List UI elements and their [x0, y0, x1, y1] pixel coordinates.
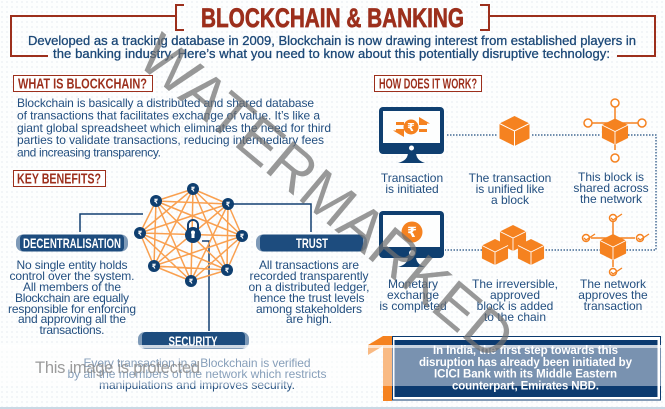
icon: monitor with rupee: ₹: [407, 121, 415, 134]
callout: india: [368, 336, 660, 401]
heading: key benefits: KEY BENEFITS?: [17, 172, 101, 188]
step: transaction initiated: [379, 107, 444, 196]
text: hence the trust levels: [254, 291, 364, 305]
step: approval: [578, 214, 649, 313]
icon: padlock: [185, 220, 201, 243]
callout box: [392, 336, 660, 400]
step: block added: [472, 225, 558, 324]
label: [472, 277, 558, 324]
text: transactions.: [40, 323, 104, 337]
label: is unified like: [476, 182, 545, 196]
panel: what is blockchain: [14, 76, 331, 160]
callout text: ICICI Bank with its Middle Eastern: [434, 368, 617, 380]
icon: approved network cube: [582, 214, 649, 276]
text: No single entity holds: [16, 258, 128, 272]
text: All transactions are: [259, 258, 359, 272]
label: The network: [580, 277, 647, 291]
callout text: disruption has already been initiated by: [419, 357, 633, 369]
watermark band: [0, 345, 665, 386]
text: [8, 258, 136, 337]
icon: orange numeral one: [368, 336, 392, 401]
title: BLOCKCHAIN & BANKING: [201, 3, 464, 33]
icon: three cubes: [482, 225, 544, 265]
heading: how does it work: HOW DOES IT WORK?: [379, 76, 477, 92]
text: [248, 258, 370, 326]
label: to the chain: [484, 310, 546, 324]
body text: parties to validate transactions, reducing intermediary fees: [17, 133, 324, 147]
text: among stakeholders: [256, 302, 362, 316]
body text: [17, 96, 331, 160]
watermark: large diagonal: WATERMARKED: [127, 21, 527, 372]
icon: cube: [500, 116, 530, 146]
text: All members of the: [23, 280, 121, 294]
label: approved: [490, 288, 540, 302]
body text: Blockchain is basically a distributed and shared database: [17, 96, 314, 110]
heading: what is blockchain: WHAT IS BLOCKCHAIN?: [18, 76, 147, 92]
step: unified block: [469, 116, 551, 207]
label: a block: [491, 193, 530, 207]
label: [469, 171, 551, 207]
pill: [138, 332, 249, 349]
intro text: the banking industry. Here’s what you need to know about this potentially disruptive technology:: [53, 46, 610, 61]
network diagram: [134, 183, 248, 287]
watermark: protected notice: This image is protected: [35, 359, 200, 377]
text: by all the members of the network which restricts: [68, 367, 326, 381]
label: [573, 170, 649, 206]
label: [379, 277, 447, 313]
icon: networked cube: [584, 99, 646, 162]
intro text: Developed as a tracking database in 2009, Blockchain is now drawing interest from established players in: [28, 33, 636, 48]
benefit: decentralisation: [8, 234, 136, 337]
label: This block is: [578, 170, 644, 184]
label: the network: [580, 192, 643, 206]
benefit: security: [68, 332, 326, 392]
pill: TRUST: [296, 235, 328, 251]
label: [381, 171, 443, 196]
body text: giant global spreadsheet which eliminates the need for third: [17, 121, 331, 135]
text: Blockchain are equally: [15, 291, 129, 305]
text: Every transaction in a Blockchain is verified: [84, 356, 310, 370]
label: approves the: [578, 288, 648, 302]
heading: how does it work: [374, 76, 482, 92]
label: transaction: [584, 299, 642, 313]
label: is initiated: [385, 182, 439, 196]
network links: [140, 189, 242, 281]
connectors: [80, 204, 311, 331]
text: [68, 356, 326, 392]
icon: monitor with rupee: ₹: [407, 225, 417, 241]
label: Transaction: [381, 171, 443, 185]
intro text: [28, 33, 636, 61]
text: control over the system.: [10, 269, 134, 283]
label: The irreversible,: [472, 277, 558, 291]
step: monetary exchange: [379, 211, 447, 313]
label: The transaction: [469, 171, 551, 185]
title frame: [11, 5, 655, 56]
text: on a distributed ledger,: [248, 280, 370, 294]
body text: and increasing transparency.: [17, 146, 161, 160]
benefit: trust: [248, 234, 370, 326]
pill: DECENTRALISATION: [23, 235, 121, 251]
text: are high.: [286, 312, 332, 326]
text: manipulations and improves security.: [99, 378, 295, 392]
text: and approving all the: [18, 312, 126, 326]
label: shared across: [573, 181, 649, 195]
network nodes: [134, 183, 248, 287]
callout text: counterpart, Emirates NBD.: [452, 380, 599, 392]
label: Monetary: [388, 277, 438, 291]
dotted flow lines: [445, 135, 656, 250]
label: [578, 277, 648, 313]
text: responsible for enforcing: [8, 302, 136, 316]
label: is completed: [379, 299, 447, 313]
body text: of transactions that facilitates exchange of value. It’s like a: [17, 108, 320, 122]
label: exchange: [387, 288, 439, 302]
callout text: In India, the first step towards this: [433, 345, 618, 357]
step: shared block: [573, 99, 649, 206]
label: block is added: [477, 299, 553, 313]
pill: SECURITY: [168, 333, 218, 349]
callout text: [419, 345, 633, 392]
text: recorded transparently: [250, 269, 368, 283]
